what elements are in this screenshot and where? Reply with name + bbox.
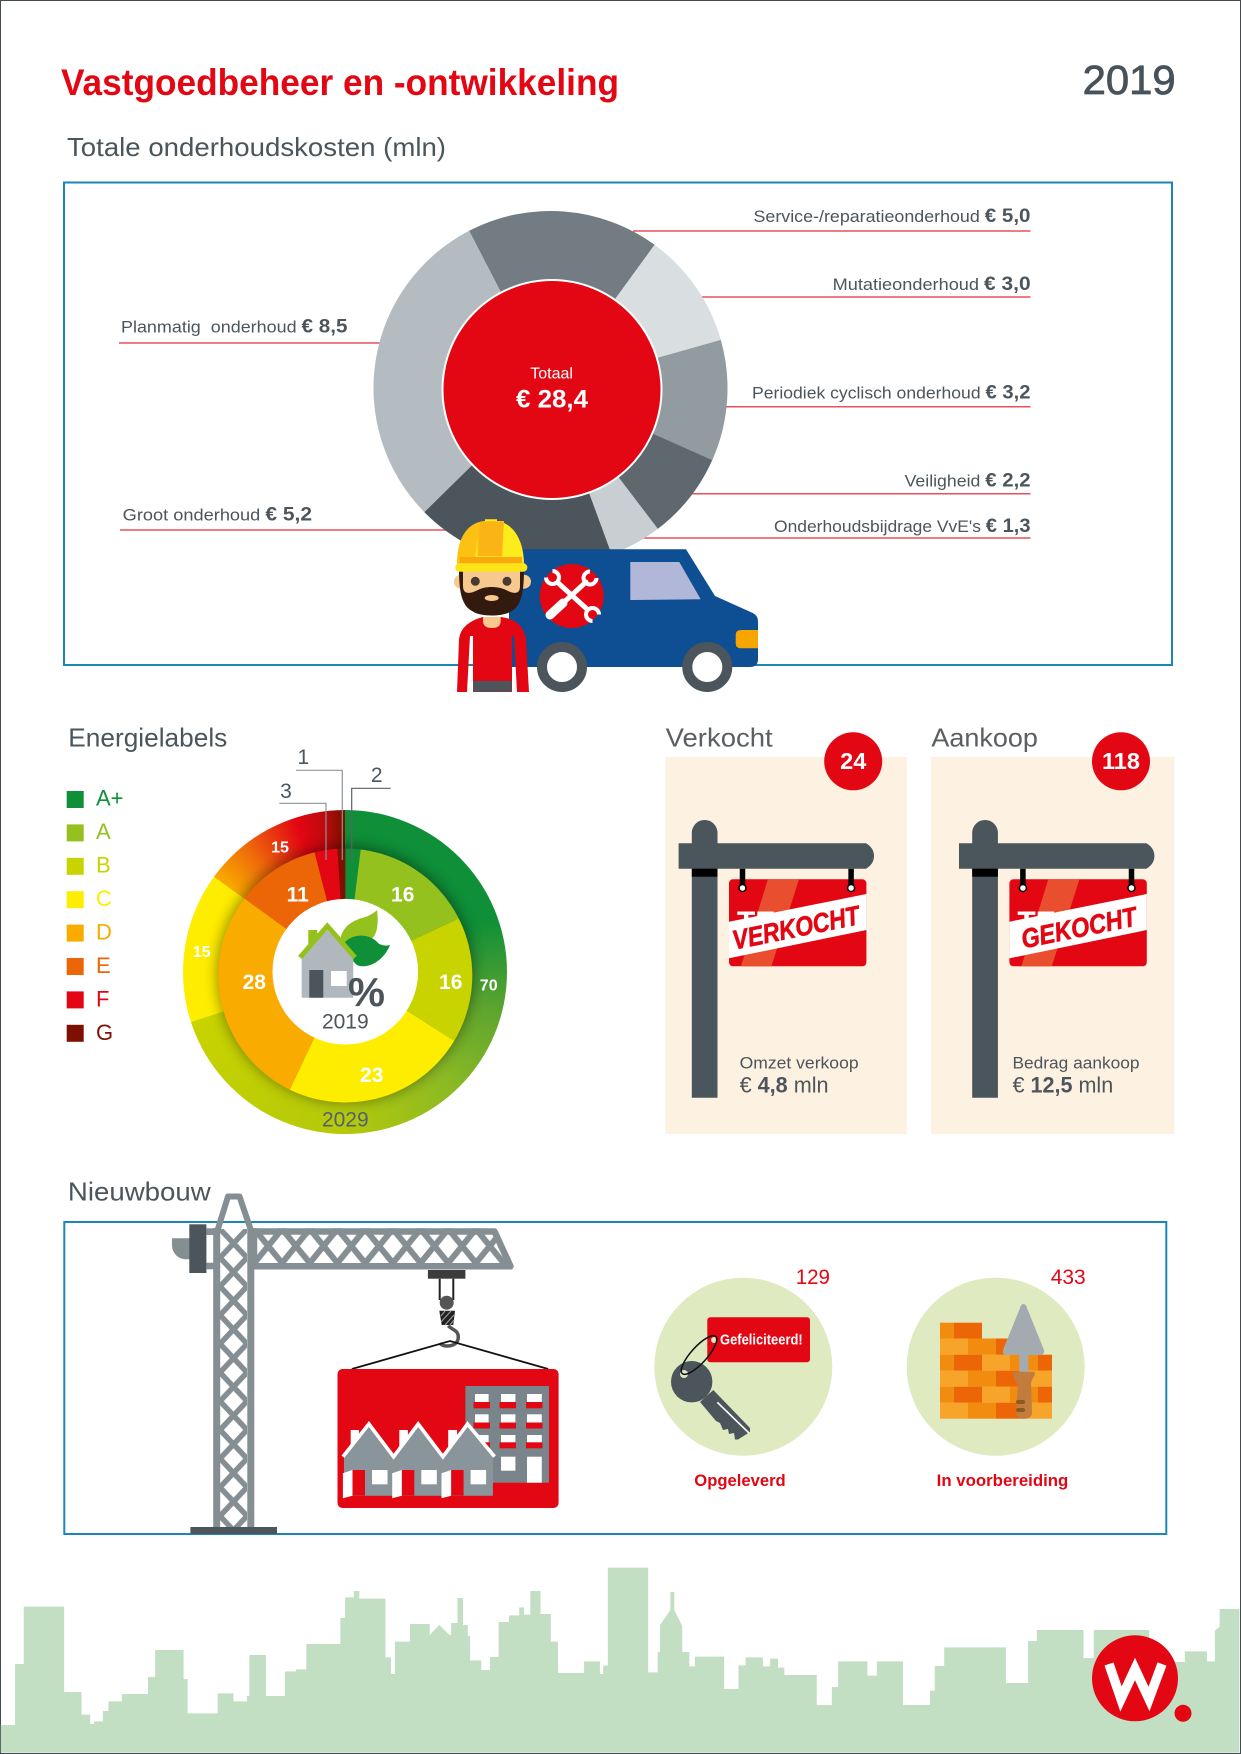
segment: groot (424, 388, 612, 565)
label: In voorbereiding (937, 1472, 1068, 1490)
label: planmatig: Planmatig onderhoud € 8,5 (121, 317, 348, 338)
ring year: 2019: 2019 (322, 1011, 369, 1034)
icon: sign post (679, 820, 874, 1098)
icon: crane (172, 1196, 559, 1534)
trowel (1003, 1304, 1044, 1419)
donut chart: energielabels 2019 (218, 848, 472, 1102)
icon: key with tag (671, 1317, 810, 1440)
sign board (1009, 879, 1147, 966)
segment E (244, 852, 328, 929)
icon: sign post (959, 820, 1154, 1098)
outer ring values: 70 (480, 978, 498, 995)
mast (220, 1229, 247, 1527)
icon: sign post: TE K (737, 906, 806, 939)
van window (630, 562, 701, 600)
icon: brick wall and trowel (940, 1304, 1052, 1419)
inner ring values: 16 (391, 884, 414, 907)
callouts 1 2 3: 2 (371, 764, 383, 787)
legend: energielabels: D (96, 920, 112, 944)
leader lines: onderhoudskosten (119, 231, 1030, 538)
hangers (742, 869, 851, 886)
shirt (457, 617, 529, 692)
wheels (542, 647, 582, 687)
helmet (457, 519, 524, 564)
jib (254, 1228, 516, 1270)
inner ring values: 11 (287, 884, 309, 907)
callouts 1 2 3: 3 (280, 780, 292, 803)
legend: energielabels: A (96, 819, 111, 844)
inner ring shadow (217, 846, 473, 1102)
icon: van (509, 549, 758, 687)
legend: energielabels: A+ (96, 786, 124, 810)
segment B (406, 918, 472, 1041)
centre text (516, 366, 588, 414)
heading: verkocht: Verkocht (666, 723, 774, 753)
callouts 1 2 3 (279, 746, 391, 860)
legend: energielabels: G (96, 1020, 113, 1045)
segment D (218, 898, 314, 1090)
icon: worker (454, 519, 531, 692)
beard (459, 568, 524, 616)
segment: VvE (550, 388, 658, 554)
value: omzet: € 4,8 mln (740, 1073, 829, 1098)
van headlight (736, 630, 758, 648)
stat: in voorbereiding (907, 1266, 1086, 1490)
heading: energielabels: Energielabels (68, 723, 227, 753)
icon: sign post: VERKOCHT (730, 900, 864, 956)
legend: energielabels: B (96, 852, 111, 878)
badge (824, 732, 882, 790)
inner ring values: 28 (243, 971, 266, 994)
inner ring values (243, 884, 462, 1087)
icon: key with tag: Gefeliciteerd! (720, 1332, 803, 1348)
heading: nieuwbouw: Nieuwbouw (68, 1177, 211, 1207)
legend: energielabels: C (96, 886, 112, 911)
label: periodiek: Periodiek cyclisch onderhoud € 3,2 (752, 383, 1030, 404)
title: Vastgoedbeheer en -ontwikkeling (61, 62, 619, 103)
segment G (338, 848, 346, 899)
donut chart: onderhoudskosten (373, 211, 728, 565)
crane top (217, 1196, 252, 1232)
row of houses (343, 1424, 495, 1498)
badge: 118 (1102, 748, 1140, 774)
inner ring values: 16 (439, 971, 462, 994)
legend: energielabels: F (96, 986, 109, 1012)
label: mutatie: Mutatieonderhoud € 3,0 (833, 274, 1031, 295)
label: VvE: Onderhoudsbijdrage VvE's € 1,3 (774, 516, 1030, 537)
icon: house with leaves (300, 910, 390, 1015)
callouts 1 2 3: 1 (297, 746, 309, 769)
hangers (1023, 869, 1132, 886)
centre circle (442, 280, 662, 499)
counter jib (206, 1228, 216, 1235)
outer ring values (193, 840, 498, 995)
text: bedrag aankoop: Bedrag aankoop (1012, 1053, 1140, 1072)
apartment block (465, 1386, 549, 1483)
centre text: Totaal (530, 366, 573, 382)
panel: aankoop (931, 732, 1174, 1134)
face (463, 570, 520, 593)
ears (454, 575, 468, 589)
text: omzet verkoop: Omzet verkoop (740, 1053, 859, 1072)
badge: 24 (840, 748, 866, 774)
segment: service (469, 211, 655, 388)
outer donut ring: energielabels 2029 (183, 810, 507, 1134)
label: groot: Groot onderhoud € 5,2 (123, 504, 312, 526)
segment: veiligheid (550, 388, 712, 529)
panel: verkocht (665, 732, 907, 1134)
outer ring values: 15 (193, 944, 211, 961)
segment: periodiek (550, 340, 728, 460)
tools badge (540, 564, 604, 628)
heading: totale onderhoudskosten: Totale onderhoudskosten (mln) (67, 132, 446, 162)
label: veiligheid: Veiligheid € 2,2 (905, 471, 1031, 492)
icon: house with leaves: % (348, 969, 385, 1015)
icon: sign post: TE K (1017, 906, 1086, 939)
segment: mutatie (550, 245, 721, 388)
legend: energielabels: E (96, 953, 111, 978)
donut centre (272, 899, 418, 1044)
panel: nieuwbouw (64, 1222, 1166, 1534)
year: 2019 (1083, 57, 1176, 103)
skyline (0, 1568, 1240, 1753)
segment A (354, 850, 459, 941)
segment F (314, 848, 341, 902)
heading: aankoop: Aankoop (931, 723, 1038, 753)
centre text: € 28,4 (516, 386, 588, 414)
legend: energielabels (67, 786, 124, 1045)
value: 433 (1051, 1266, 1086, 1289)
sign board (729, 879, 866, 966)
inner ring values: 23 (360, 1064, 383, 1087)
value: bedrag: € 12,5 mln (1012, 1073, 1113, 1098)
value: 129 (796, 1266, 830, 1289)
segment C (290, 1010, 454, 1102)
label: Opgeleverd (694, 1472, 786, 1490)
icon: sign post: GEKOCHT (1019, 901, 1141, 954)
stat: opgeleverd (654, 1266, 832, 1490)
logo (1092, 1635, 1192, 1722)
segment A+ (345, 848, 360, 900)
panel: onderhoudskosten (64, 182, 1172, 665)
outer ring values: 15 (271, 840, 289, 857)
suspended card (338, 1369, 559, 1508)
crane base (190, 1527, 277, 1534)
label: service: Service-/reparatieonderhoud € 5,0 (754, 206, 1030, 227)
segment: planmatig (373, 231, 550, 512)
hook assembly (352, 1270, 548, 1369)
badge (1092, 732, 1150, 790)
ring year: 2029: 2029 (322, 1109, 369, 1132)
